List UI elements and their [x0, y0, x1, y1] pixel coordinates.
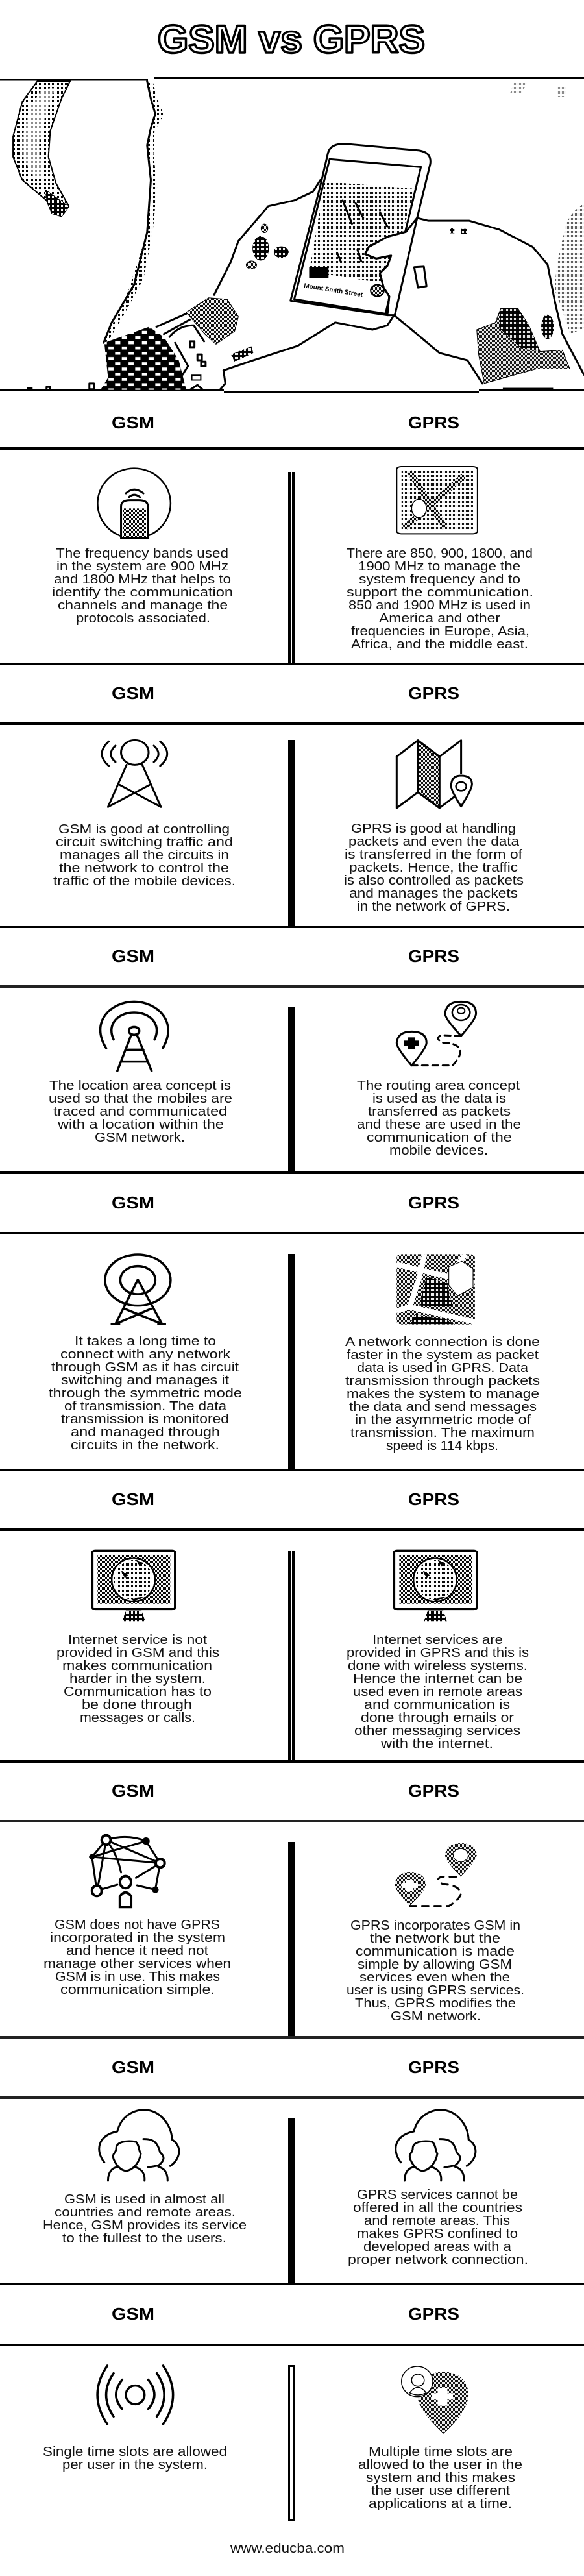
text: GSM incorporation: incorporated in the system [50, 1931, 225, 1945]
text: GSM connection: of transmission. The data [64, 1399, 227, 1414]
column headings row 7 [112, 2057, 459, 2077]
column headings row 6: GPRS [408, 1781, 459, 1800]
text: GPRS incorporation: the network but the [370, 1932, 500, 1946]
icon: two users [396, 2110, 476, 2181]
text: GSM internet: provided in GSM and this [56, 1646, 219, 1660]
text: GPRS traffic: GPRS is good at handling [351, 822, 516, 836]
text: GPRS traffic [344, 822, 524, 914]
column headings row 2: GPRS [408, 683, 459, 703]
text: GPRS connection: speed is 114 kbps. [386, 1439, 498, 1453]
text: GSM location: traced and communicated [53, 1105, 227, 1119]
text: GSM internet: harder in the system. [69, 1672, 206, 1686]
text: GSM traffic: traffic of the mobile devices. [53, 874, 236, 889]
text: GPRS incorporation: services even when the [359, 1970, 510, 1985]
column headings row 4: GSM [112, 1193, 154, 1212]
text: GPRS incorporation: GPRS incorporates GSM in [350, 1919, 520, 1933]
text: GPRS frequency: system frequency and to [359, 572, 520, 587]
icon: tower with rings [105, 1255, 171, 1324]
panel: frequency bands [0, 467, 584, 665]
panel: traffic handling [0, 740, 584, 928]
text: GSM frequency: protocols associated. [76, 611, 210, 626]
text: GPRS incorporation: GSM network. [391, 2009, 481, 2024]
text: GSM coverage [43, 2192, 247, 2246]
text: GSM location: GSM network. [95, 1131, 185, 1145]
text: GPRS time slots: allowed to the user in the [358, 2458, 522, 2472]
text: GPRS time slots: applications at a time. [369, 2497, 512, 2511]
text: GPRS incorporation: user is using GPRS services. [347, 1983, 524, 1998]
text: GPRS incorporation [347, 1919, 524, 2024]
text: GPRS routing: and these are used in the [357, 1118, 521, 1132]
icon: two users [99, 2110, 179, 2181]
text: GPRS coverage: GPRS services cannot be [357, 2188, 518, 2202]
column headings row 4 [112, 1193, 459, 1212]
icon: network nodes [89, 1835, 165, 1907]
icon: radio tower [102, 740, 167, 807]
text: GPRS internet: Internet services are [372, 1633, 503, 1647]
text: GPRS connection: transmission. The maximum [350, 1426, 535, 1440]
text: GPRS coverage [348, 2188, 528, 2267]
text: GSM traffic: GSM is good at controlling [58, 822, 230, 837]
text: GPRS connection: transmission through packets [345, 1374, 540, 1388]
text: GSM coverage: GSM is used in almost all [64, 2192, 225, 2207]
column headings row 2: GSM [112, 683, 154, 703]
text: GPRS traffic: and manages the packets [349, 887, 518, 901]
text: GPRS internet: other messaging services [354, 1724, 520, 1738]
icon: monitor with globe [394, 1551, 477, 1621]
text: GPRS connection: data is used in GPRS. Data [357, 1361, 529, 1375]
text: GPRS traffic: is transferred in the form of [345, 848, 523, 862]
icon: phone with signal in circle [97, 469, 171, 539]
divider [288, 1842, 295, 2037]
text: GSM incorporation: GSM does not have GPRS [55, 1918, 220, 1932]
text: GPRS frequency: America and other [379, 611, 500, 626]
text: GPRS routing: mobile devices. [389, 1144, 488, 1158]
text: GPRS internet: done through emails or [361, 1711, 514, 1725]
icon: map [396, 467, 478, 534]
text: GPRS connection: A network connection is done [345, 1335, 540, 1349]
text: GPRS traffic: in the network of GPRS. [357, 900, 510, 914]
text: GPRS connection: faster in the system as packet [347, 1348, 539, 1362]
text: GPRS internet: with the internet. [380, 1737, 493, 1751]
text: GPRS routing: communication of the [367, 1131, 512, 1145]
text: GSM connection: through GSM as it has circuit [51, 1360, 239, 1375]
text: GSM frequency: channels and manage the [58, 598, 228, 613]
divider [288, 2118, 295, 2284]
divider [288, 1551, 295, 1761]
column headings row 7: GSM [112, 2057, 154, 2077]
text: GSM incorporation: communication simple. [60, 1983, 215, 1997]
column headings row 1: GPRS [408, 413, 459, 432]
panel: GPRS incorporation [0, 1835, 584, 2039]
text: GPRS incorporation: communication is made [356, 1944, 515, 1959]
text: GSM connection [49, 1334, 242, 1453]
text: GSM connection: connect with any network [60, 1347, 231, 1362]
text: GSM frequency [52, 546, 233, 626]
text: GPRS time slots: the user use different [371, 2484, 511, 2498]
text: GPRS frequency: 850 and 1900 MHz is used in [348, 598, 531, 613]
divider [288, 1007, 295, 1173]
column headings row 6 [112, 1781, 459, 1800]
icon: two location pins with dashed route [396, 1001, 476, 1066]
text: GSM time slots: Single time slots are allowed [43, 2445, 227, 2459]
column headings row 4: GPRS [408, 1193, 459, 1212]
column headings row 3 [112, 946, 459, 966]
column headings row 1: GSM [112, 413, 154, 432]
text: GSM traffic: circuit switching traffic and [56, 835, 233, 850]
text: GPRS internet: and communication is [364, 1698, 510, 1712]
text: GSM time slots: per user in the system. [62, 2458, 208, 2472]
text: GSM traffic: the network to control the [59, 861, 229, 876]
text: GSM location: with a location within the [57, 1118, 224, 1132]
text: GSM connection: transmission is monitored [61, 1412, 229, 1427]
text: GPRS connection [345, 1335, 540, 1453]
text: GSM connection: It takes a long time to [75, 1334, 216, 1349]
text: GSM internet: be done through [82, 1698, 192, 1712]
text: GSM internet: messages or calls. [80, 1711, 195, 1725]
icon: pin with cross and user badge [402, 2366, 468, 2434]
icon: monitor with globe [92, 1551, 175, 1621]
text: GPRS traffic: is also controlled as packets [344, 874, 524, 888]
text: GSM connection: circuits in the network. [71, 1438, 219, 1453]
text: GPRS frequency: 1900 MHz to manage the [358, 559, 520, 574]
text: GSM location: The location area concept is [49, 1079, 231, 1093]
text: GPRS coverage: developed areas with a [363, 2240, 512, 2254]
text: GSM location: used so that the mobiles are [49, 1092, 232, 1106]
column headings row 8: GSM [112, 2304, 154, 2324]
text: GSM incorporation: manage other services when [43, 1957, 231, 1971]
text: GSM time slots [43, 2445, 227, 2472]
text: GSM connection: through the symmetric mode [49, 1386, 242, 1401]
text: GPRS time slots: Multiple time slots are [369, 2445, 513, 2459]
text: GPRS connection: in the asymmetric mode of [355, 1413, 531, 1427]
text: GSM incorporation: GSM is in use. This makes [55, 1970, 220, 1984]
text: GSM incorporation [43, 1918, 231, 1997]
divider [288, 1254, 295, 1470]
column headings row 3: GPRS [408, 946, 459, 966]
hero illustration: hands holding a smartphone with a map: Mount Smith Street [304, 282, 363, 299]
text: GSM internet: Internet service is not [68, 1633, 207, 1647]
icon: antenna with arcs [101, 1001, 168, 1071]
text: GPRS coverage: proper network connection. [348, 2253, 528, 2267]
footer: website: www.educba.com [230, 2542, 345, 2556]
icon: city map tile [396, 1254, 475, 1325]
text: GSM connection: and managed through [71, 1425, 220, 1440]
text: GPRS internet: Hence the internet can be [353, 1672, 522, 1686]
text: GSM traffic: manages all the circuits in [60, 848, 229, 863]
column headings row 7: GPRS [408, 2057, 459, 2077]
text: GPRS routing: is used as the data is [372, 1092, 506, 1106]
text: GPRS internet: used even in remote areas [353, 1685, 522, 1699]
text: GPRS routing: The routing area concept [357, 1079, 520, 1093]
text: GPRS incorporation: Thus, GPRS modifies the [355, 1996, 516, 2011]
text: GPRS internet: done with wireless systems. [348, 1659, 528, 1673]
text: GPRS coverage: makes GPRS confined to [357, 2227, 518, 2241]
text: GPRS incorporation: simple by allowing GSM [358, 1957, 512, 1972]
text: GPRS frequency: Africa, and the middle east. [351, 637, 528, 652]
text: GPRS internet [347, 1633, 529, 1751]
text: GSM incorporation: and hence it need not [66, 1944, 208, 1958]
hero illustration: hands holding a smartphone with a map [0, 77, 584, 393]
column headings row 1 [112, 413, 459, 432]
text: GSM internet [56, 1633, 219, 1725]
column headings row 3: GSM [112, 946, 154, 966]
text: GSM frequency: in the system are 900 MHz [56, 559, 228, 574]
text: GPRS internet: provided in GPRS and this is [347, 1646, 529, 1660]
column headings row 8: GPRS [408, 2304, 459, 2324]
text: GSM internet: makes communication [62, 1659, 212, 1673]
text: GSM coverage: to the fullest to the users. [62, 2231, 226, 2246]
text: GSM connection: switching and manages it [61, 1373, 230, 1388]
text: GPRS traffic: packets and even the data [348, 835, 520, 849]
column headings row 8 [112, 2304, 459, 2324]
text: GPRS traffic: packets. Hence, the traffic [349, 861, 518, 875]
text: GSM coverage: Hence, GSM provides its service [43, 2218, 247, 2233]
text: GPRS frequency: frequencies in Europe, Asia, [351, 624, 529, 639]
text: GPRS routing: transferred as packets [368, 1105, 511, 1119]
divider [288, 472, 295, 664]
panel: connection speed [0, 1254, 584, 1471]
text: GPRS routing [357, 1079, 521, 1158]
column headings row 5: GSM [112, 1490, 154, 1509]
column headings row 5 [112, 1490, 459, 1509]
text: GPRS time slots: system and this makes [366, 2471, 515, 2485]
text: GSM location [49, 1079, 232, 1145]
text: GPRS connection: makes the system to manage [347, 1387, 539, 1401]
text: GSM internet: Communication has to [64, 1685, 212, 1699]
text: GSM frequency: and 1800 MHz that helps to [54, 572, 231, 587]
text: GPRS coverage: and remote areas. This [364, 2214, 510, 2228]
text: GSM traffic [53, 822, 236, 889]
panel: coverage [0, 2110, 584, 2285]
column headings row 6: GSM [112, 1781, 154, 1800]
title: GSM vs GPRS [158, 18, 425, 61]
text: GPRS connection: the data and send messages [349, 1400, 537, 1414]
divider [288, 2365, 295, 2521]
text: GPRS frequency: There are 850, 900, 1800, and [347, 546, 533, 561]
icon: shaded location pins with route [395, 1843, 477, 1906]
icon: signal waves [97, 2366, 173, 2424]
text: GPRS time slots [358, 2445, 522, 2511]
text: GPRS frequency: support the communication. [347, 585, 533, 600]
text: GSM frequency: The frequency bands used [56, 546, 228, 561]
panel: time slots [43, 2365, 522, 2521]
panel: internet service [0, 1551, 584, 1763]
column headings row 5: GPRS [408, 1490, 459, 1509]
text: GSM frequency: identify the communication [52, 585, 233, 600]
column headings row 2 [112, 683, 459, 703]
divider [288, 740, 295, 927]
icon: folded map with pin [396, 741, 472, 808]
text: GPRS coverage: offered in all the countries [353, 2201, 522, 2215]
text: GPRS frequency [347, 546, 533, 652]
panel: location and routing area [0, 1001, 584, 1174]
text: GSM coverage: countries and remote areas. [55, 2205, 236, 2220]
